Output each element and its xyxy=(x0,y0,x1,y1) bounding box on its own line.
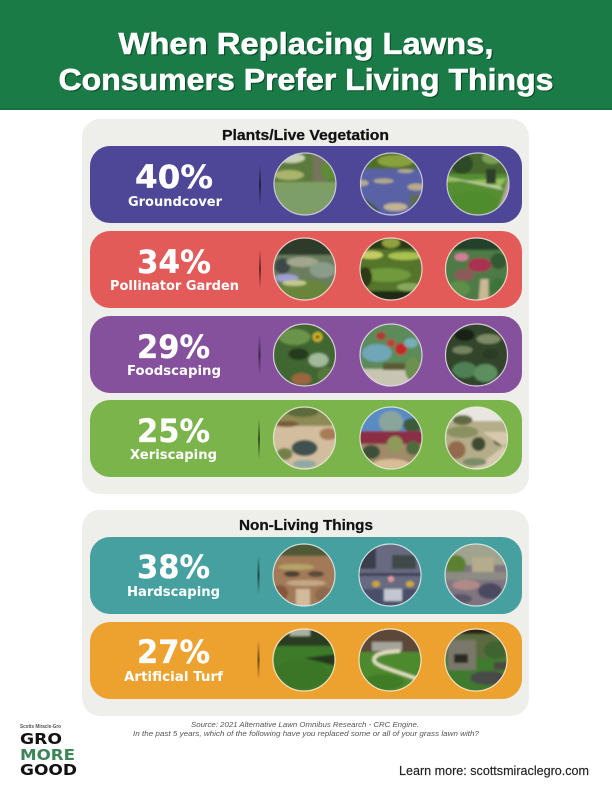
source note xyxy=(133,720,480,738)
stat: 34%: 34% xyxy=(137,243,211,281)
row: foodscaping 29% xyxy=(90,316,522,393)
label: hardscaping: Hardscaping xyxy=(127,585,220,600)
stat: 40%: 40% xyxy=(135,158,213,196)
stat: 38%: 38% xyxy=(137,548,210,586)
label: foodscaping: Foodscaping xyxy=(127,364,221,379)
panel: plants/live vegetation xyxy=(82,119,529,494)
title: When Replacing Lawns, xyxy=(118,26,494,61)
logo: Gro More Good: GRO xyxy=(20,730,62,748)
photo: turf with outdoor fireplace xyxy=(444,628,508,692)
title: When Replacing Lawns, xyxy=(120,27,495,62)
label: xeriscaping: Xeriscaping xyxy=(130,448,217,463)
title: Consumers Prefer Living Things xyxy=(58,62,554,97)
stat: 27%: 27% xyxy=(137,633,210,671)
heading: plants/live vegetation: Plants/Live Vegetation xyxy=(222,128,389,144)
photo: groundcover beside walkway xyxy=(446,152,510,216)
logo: Gro More Good: Scotts Miracle-Gro xyxy=(20,724,61,730)
panel: non-living things xyxy=(82,510,529,716)
photo: blue flowers with stepping stones xyxy=(356,152,426,216)
source note: Source: 2021 Alternative Lawn Omnibus Research - CRC Engine. xyxy=(191,720,419,729)
title: Consumers Prefer Living Things xyxy=(60,63,555,98)
row: pollinator garden 34% xyxy=(90,231,522,308)
logo: Gro More Good xyxy=(20,724,77,779)
photo: groundcover lawn with tree xyxy=(273,152,337,216)
stat: 25%: 25% xyxy=(137,412,210,450)
photo: turf lawn xyxy=(272,628,336,692)
label: groundcover: Groundcover xyxy=(128,195,223,210)
photo: pollinator border planting xyxy=(272,237,336,301)
logo: Gro More Good: GOOD xyxy=(20,761,77,779)
photo: lit stone steps at dusk xyxy=(358,543,422,607)
photo: dry creek garden xyxy=(444,406,508,470)
title xyxy=(58,26,555,98)
photo: dark leafy vegetables xyxy=(444,323,508,387)
photo: red flowers and path xyxy=(444,237,508,301)
photo: ornamental cabbage and red flowers xyxy=(359,323,423,387)
label: pollinator garden: Pollinator Garden xyxy=(110,279,239,294)
source note: In the past 5 years, which of the following have you replaced some or all of your grass lawn with? xyxy=(133,729,480,738)
photo: desert garden with red wall xyxy=(359,406,423,470)
row: xeriscaping 25% xyxy=(90,400,522,477)
header banner xyxy=(0,0,612,110)
photo: patio and house xyxy=(444,543,508,607)
label: artificial turf: Artificial Turf xyxy=(124,670,223,685)
row: hardscaping 38% xyxy=(90,537,522,614)
stat: 29%: 29% xyxy=(137,328,210,366)
row: groundcover 40% xyxy=(90,146,522,223)
photo: desert gravel garden xyxy=(272,406,338,470)
heading: non-living things: Non-Living Things xyxy=(239,518,373,534)
photo: turf with curved path xyxy=(358,628,422,692)
learn more link text: Learn more: scottsmiraclegro.com xyxy=(399,764,589,778)
logo: Gro More Good: MORE xyxy=(20,746,75,764)
photo: stone terraces xyxy=(272,543,336,607)
row: artificial turf 27% xyxy=(90,622,522,699)
photo: pollinator meadow xyxy=(358,237,423,301)
photo: vegetable garden with sunflower xyxy=(272,323,336,387)
